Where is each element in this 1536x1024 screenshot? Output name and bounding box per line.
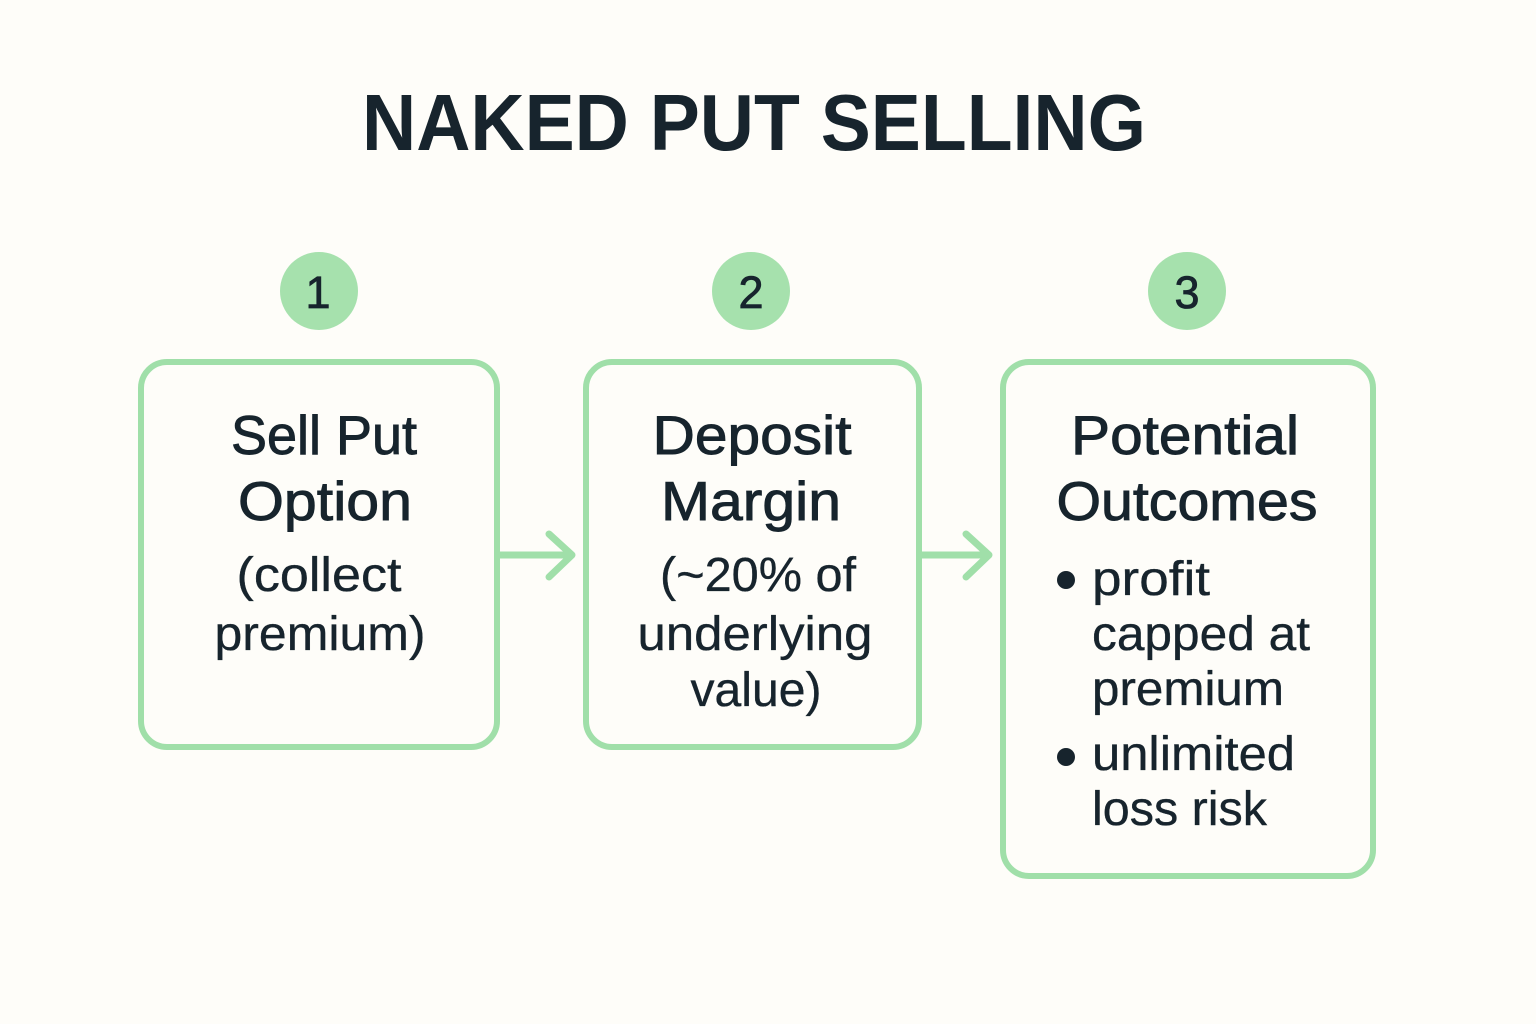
step 3 number badge: 3	[1174, 267, 1200, 318]
text: collect premium: premium)	[214, 608, 426, 661]
bullet: profit capped at premium	[1057, 553, 1310, 716]
heading: sell put option: Option	[238, 470, 412, 532]
heading: deposit margin: Deposit	[652, 404, 852, 466]
text: 20% of underlying value	[638, 549, 872, 717]
bullet: profit capped at premium: profit	[1092, 553, 1210, 606]
step 2 number badge	[712, 252, 790, 330]
bullet: profit capped at premium: capped at	[1092, 608, 1310, 661]
step 3 number badge	[1148, 252, 1226, 330]
bullet: profit capped at premium: premium	[1092, 663, 1284, 716]
heading: sell put option	[231, 404, 417, 532]
step 1 number badge	[280, 252, 358, 330]
heading: potential outcomes: Potential	[1071, 404, 1299, 466]
text: 20% of underlying value: underlying	[638, 608, 872, 661]
text: collect premium: (collect	[236, 549, 402, 602]
heading: potential outcomes: Outcomes	[1056, 470, 1318, 532]
arrow: step 2 to step 3	[920, 534, 989, 577]
step 2 number badge: 2	[738, 267, 764, 318]
heading: sell put option: Sell Put	[231, 404, 417, 466]
text: 20% of underlying value: (~20% of	[660, 549, 857, 602]
arrow: step 1 to step 2	[498, 534, 572, 577]
panel: sell put option	[141, 362, 497, 747]
text: collect premium	[214, 549, 426, 661]
heading: deposit margin: Margin	[661, 470, 841, 532]
panel: potential outcomes	[1003, 362, 1373, 876]
title: NAKED PUT SELLING	[362, 78, 1146, 167]
bullet: unlimited loss risk: unlimited	[1092, 728, 1295, 781]
heading: deposit margin	[652, 404, 852, 532]
step 1 number badge: 1	[305, 267, 331, 318]
bullet: unlimited loss risk	[1057, 728, 1295, 836]
panel: deposit margin	[586, 362, 919, 747]
heading: potential outcomes	[1056, 404, 1318, 532]
bullet: unlimited loss risk: loss risk	[1092, 783, 1268, 836]
text: 20% of underlying value: value)	[690, 664, 822, 717]
